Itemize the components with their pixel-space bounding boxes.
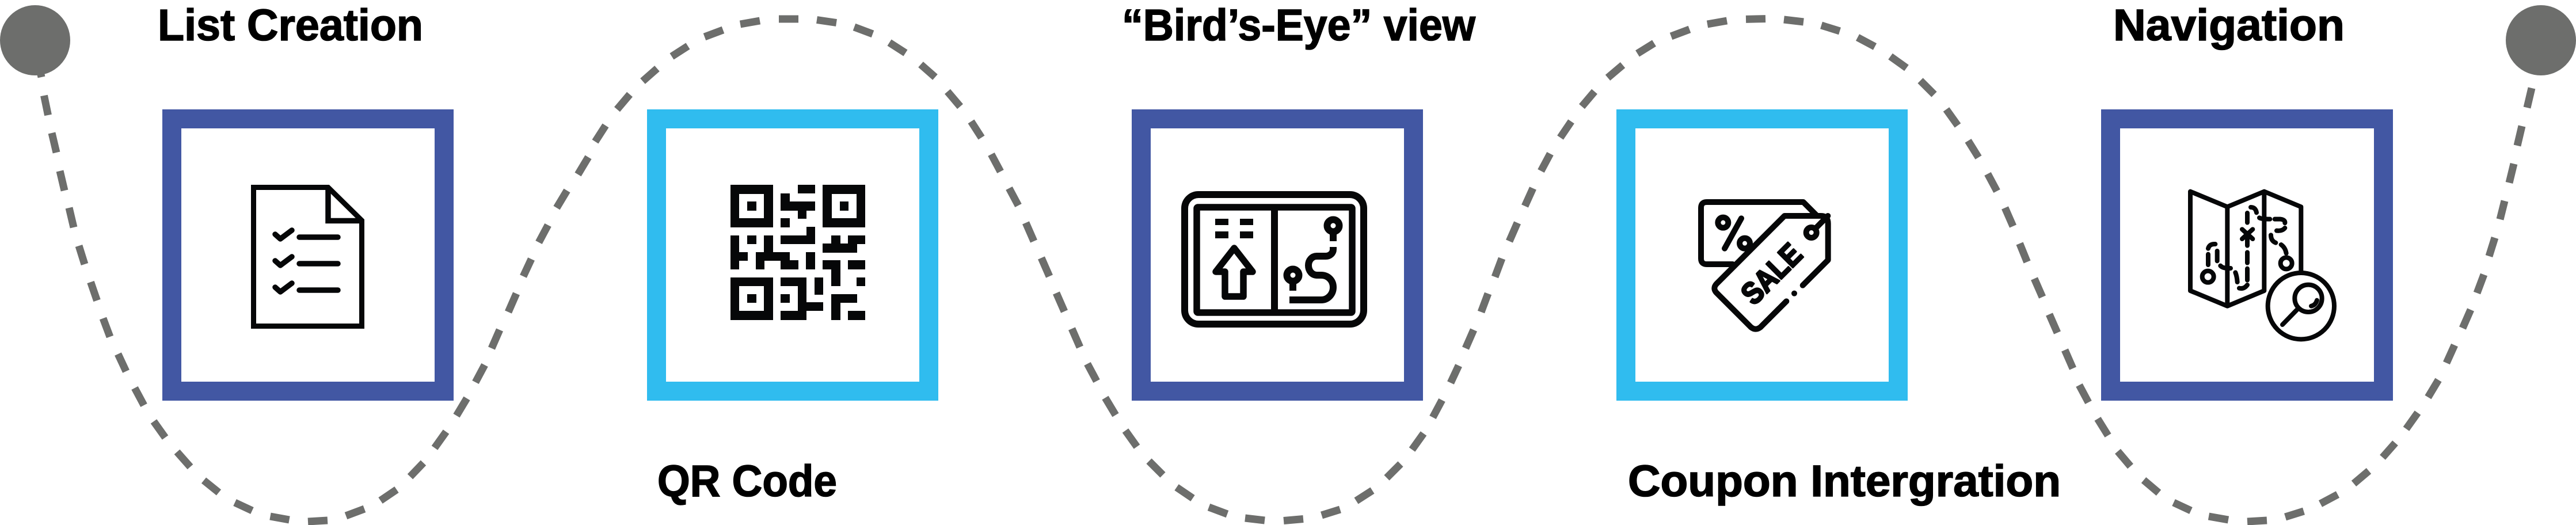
icon: sale tags [1701, 202, 1828, 329]
heading: Navigation: Navigation [2113, 1, 2345, 50]
panel: bird's-eye view frame [1141, 119, 1414, 391]
end dot [2506, 5, 2576, 75]
icon: split-screen tablet with arrow and route [1185, 195, 1364, 324]
heading: QR Code: QR Code [657, 456, 837, 506]
panel: navigation frame [2110, 119, 2383, 391]
icon: checklist document [253, 188, 362, 326]
start dot [0, 5, 70, 75]
heading: Bird's-Eye view: “Bird’s-Eye” view [1122, 1, 1476, 50]
panel: list creation frame [172, 119, 444, 391]
heading: List Creation: List Creation [158, 1, 423, 50]
panel: QR code frame [656, 119, 929, 391]
icon: sale tags: SALE [1734, 237, 1809, 311]
panel: coupon integration frame [1626, 119, 1898, 391]
icon: folded map with magnifier [2190, 192, 2334, 339]
icon: QR code [730, 185, 865, 320]
heading: Coupon Intergration: Coupon Intergration [1628, 456, 2061, 506]
